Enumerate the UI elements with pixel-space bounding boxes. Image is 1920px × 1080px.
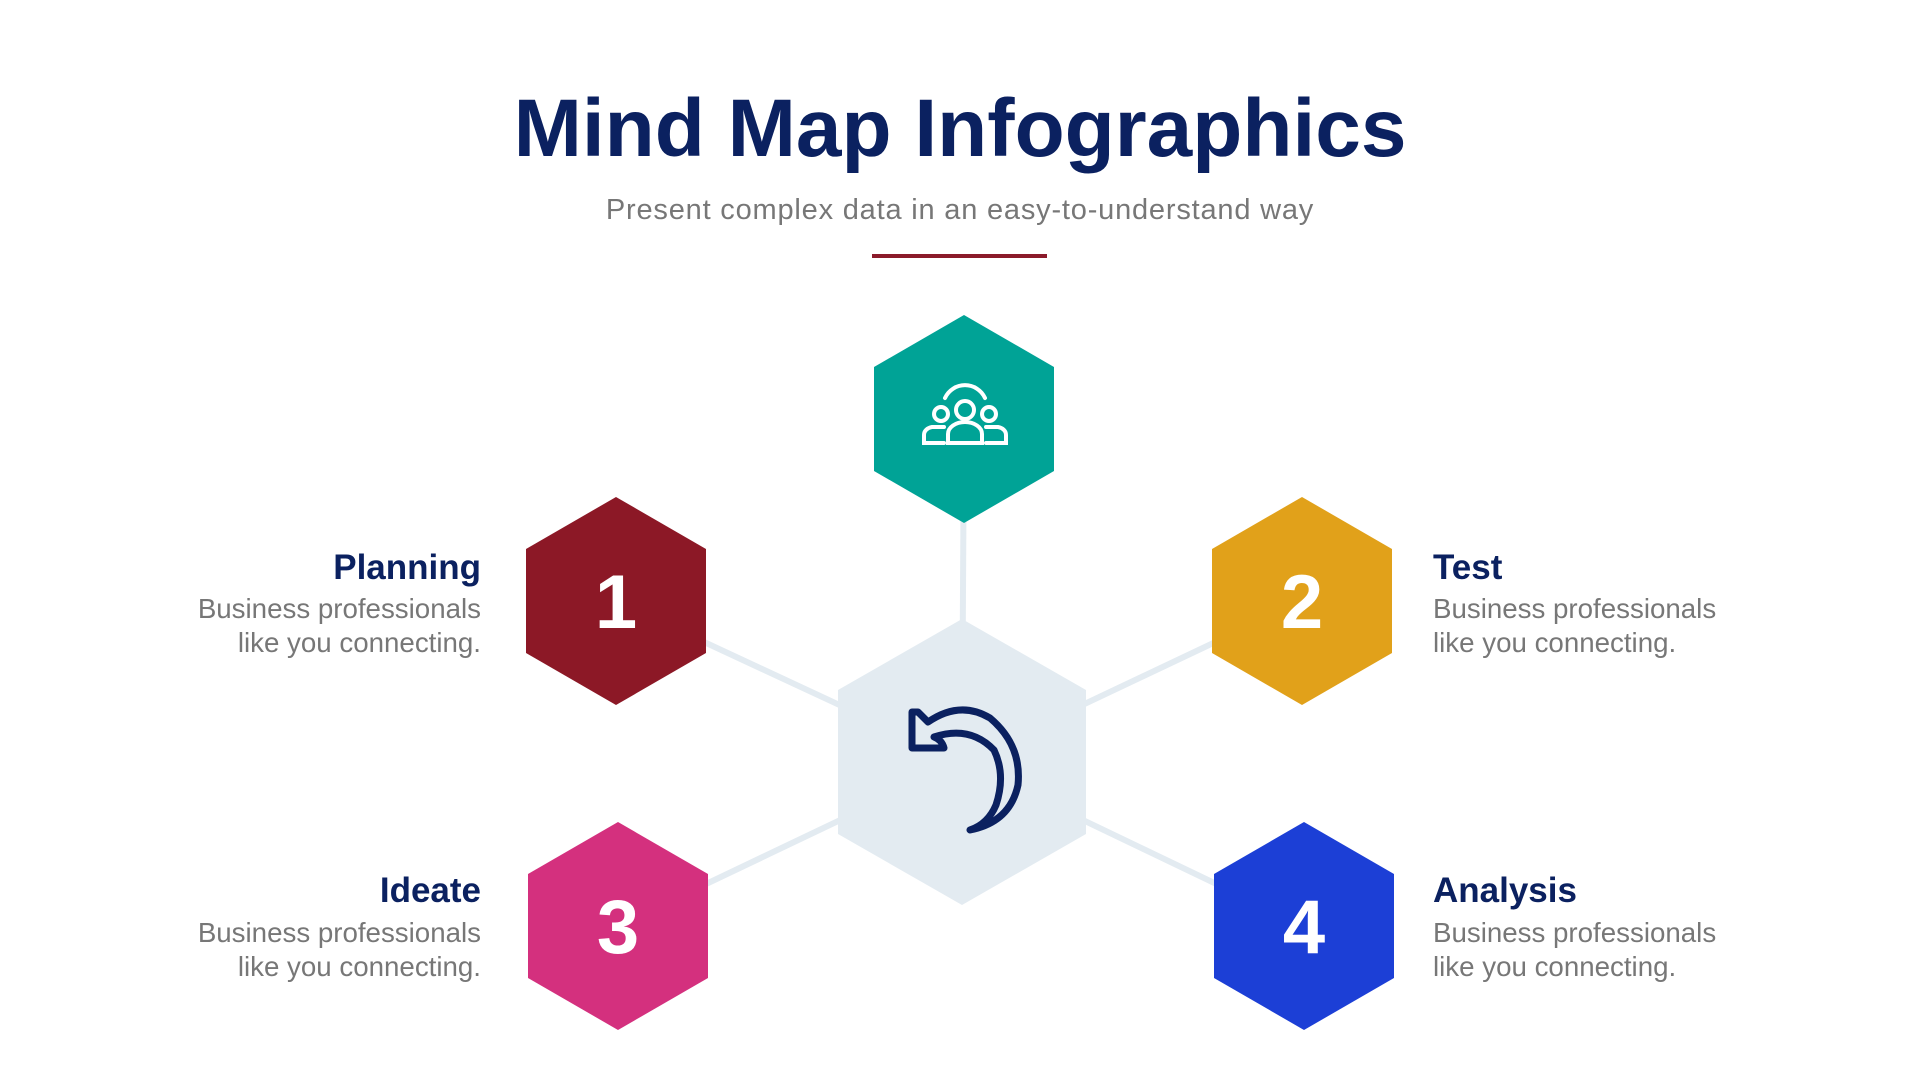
hexagon 2: 2: [1281, 560, 1323, 645]
text: Test: Business professionals: [1433, 593, 1716, 624]
text: Ideate: Ideate: [380, 871, 481, 910]
text: Ideate: like you connecting.: [238, 951, 481, 982]
icon: team: [924, 385, 1006, 443]
text: Planning: like you connecting.: [238, 627, 481, 658]
hexagon 3: 3: [597, 885, 639, 970]
connectors: [616, 419, 1304, 926]
subtitle: Present complex data in an easy-to-understand way: [606, 194, 1314, 226]
hexagon 1: 1: [595, 560, 637, 645]
text: Test: [1433, 548, 1716, 658]
hexagon 1: [526, 497, 706, 705]
text: Analysis: Analysis: [1433, 871, 1577, 910]
text: Planning: [198, 548, 481, 658]
text: Ideate: [198, 871, 481, 982]
hexagon 3: [528, 822, 708, 1030]
text: Test: Test: [1433, 548, 1503, 587]
hexagon 2: [1212, 497, 1392, 705]
text: Ideate: Business professionals: [198, 917, 481, 948]
text: Planning: Planning: [333, 548, 481, 587]
teal hexagon with team icon: [874, 315, 1054, 523]
icon: undo arrow: [912, 710, 1018, 830]
title underline: [872, 254, 1047, 258]
text: Analysis: like you connecting.: [1433, 951, 1676, 982]
center hexagon with undo icon: [838, 619, 1086, 905]
title: Mind Map Infographics: [514, 83, 1406, 174]
text: Planning: Business professionals: [198, 593, 481, 624]
hexagon 4: 4: [1283, 885, 1325, 970]
text: Analysis: Business professionals: [1433, 917, 1716, 948]
hexagon 4: [1214, 822, 1394, 1030]
text: Analysis: [1433, 871, 1716, 982]
text: Test: like you connecting.: [1433, 627, 1676, 658]
